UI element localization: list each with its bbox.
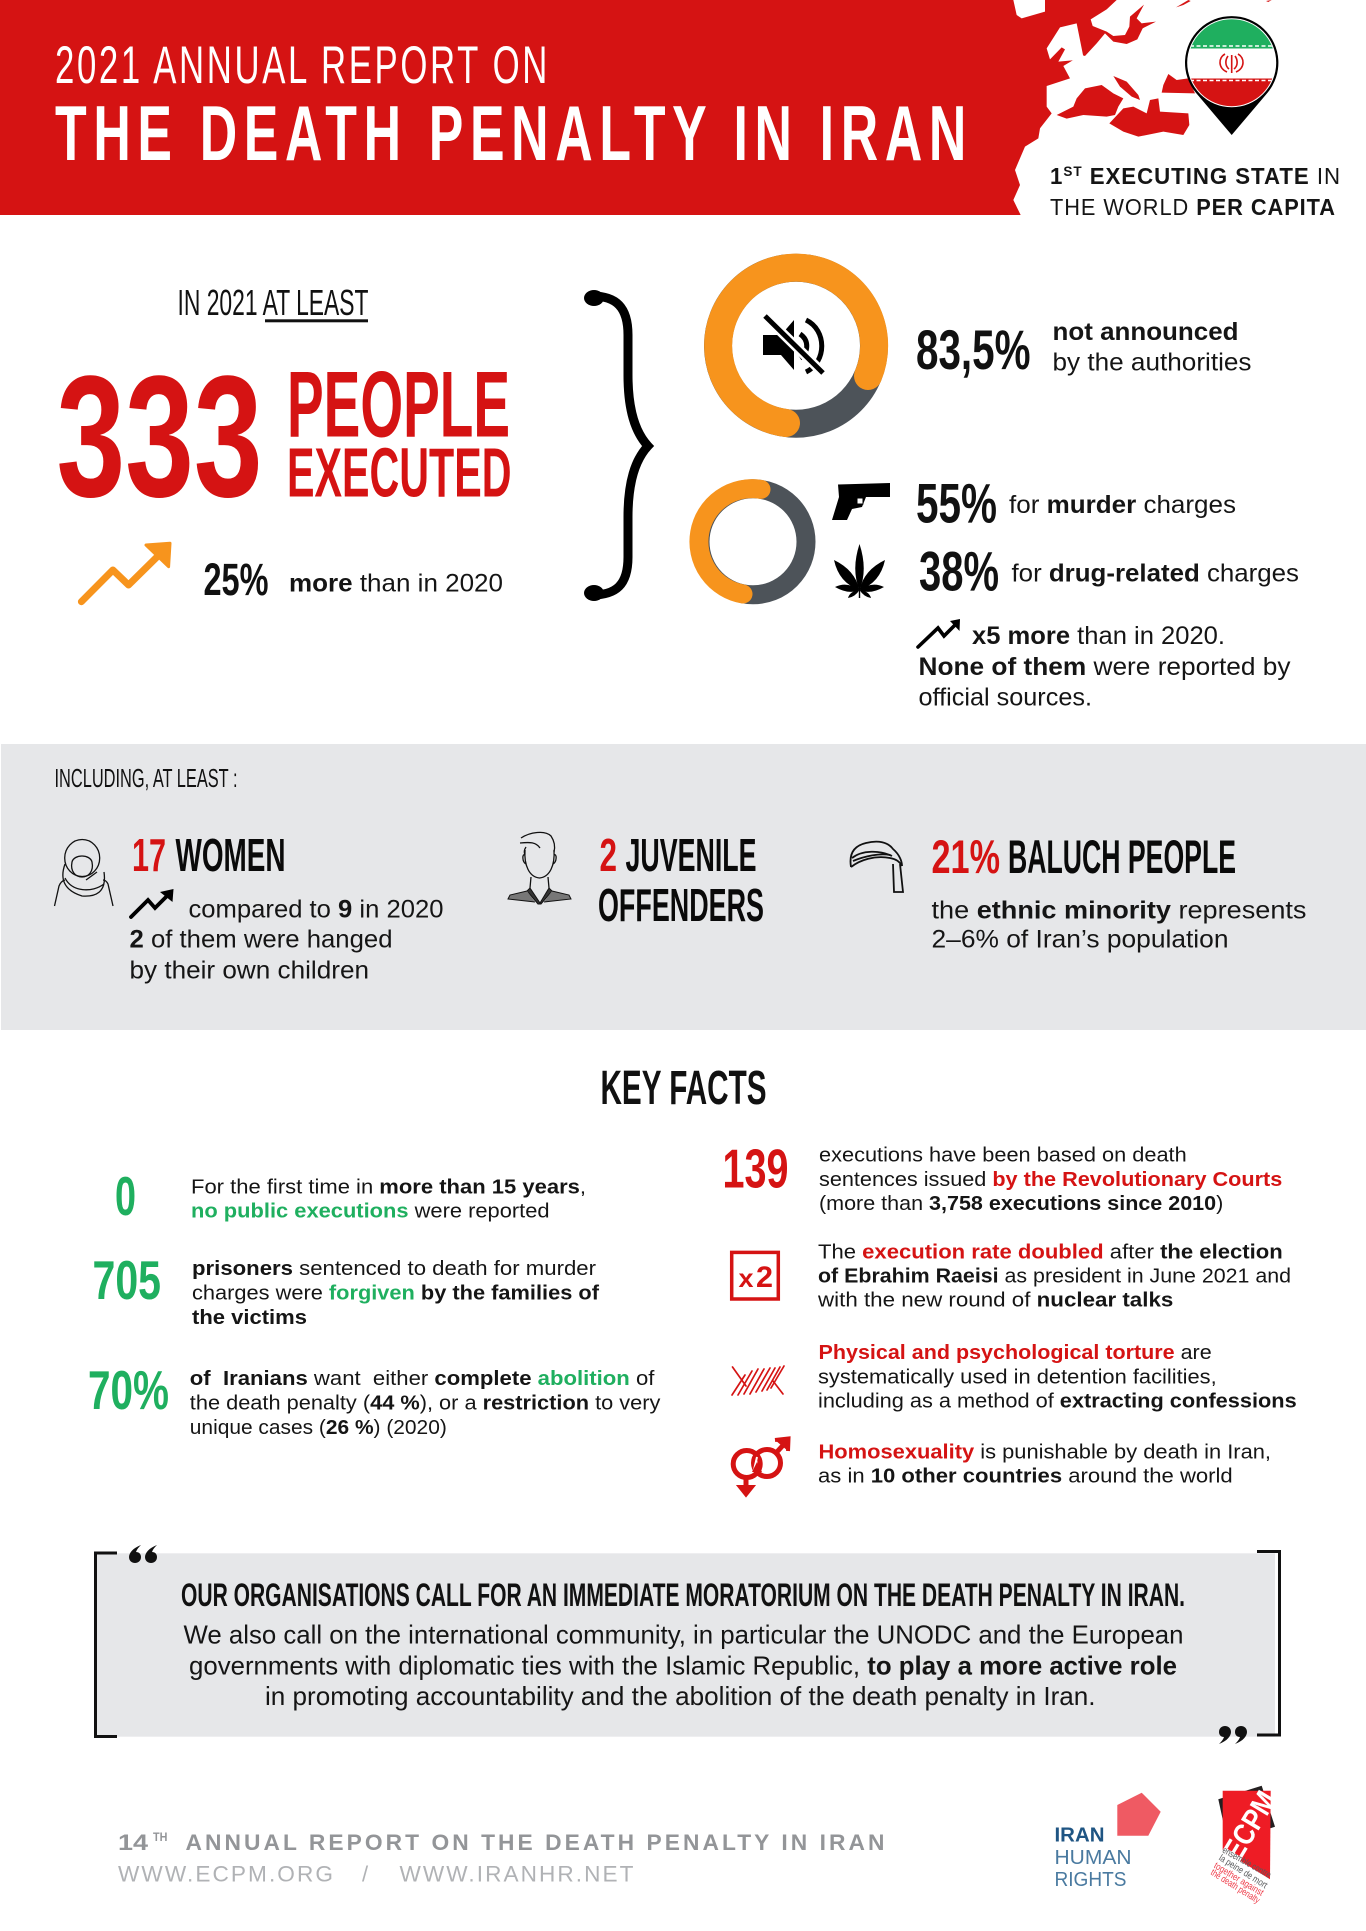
header banner xyxy=(0,0,1341,220)
333 people executed: PEOPLE xyxy=(287,352,510,457)
fact: execution rate doubled: The execution rate doubled after the election xyxy=(818,1240,1283,1263)
logo: ECPM: ECPM xyxy=(1217,1786,1283,1866)
drug note: None of them were reported by xyxy=(918,653,1291,681)
fact: torture: including as a method of extracting confessions xyxy=(818,1389,1297,1412)
websites: WWW.IRANHR.NET xyxy=(400,1862,636,1887)
panel: headline figure xyxy=(56,282,512,605)
intro line: IN 2021 AT LEAST xyxy=(178,282,368,323)
icon: x2 box: 2 xyxy=(756,1261,773,1294)
21 percent Baluch people: 21% xyxy=(932,830,1000,883)
logo: ECPM xyxy=(1208,1786,1283,1906)
panel: key facts right xyxy=(722,1137,1297,1496)
2 juvenile offenders: 2 xyxy=(600,829,617,881)
logo: Iran Human Rights: HUMAN xyxy=(1054,1847,1132,1869)
icon: x2 box xyxy=(732,1252,778,1299)
fact: 705 forgiven: 705 xyxy=(92,1249,161,1311)
fact: homosexuality: Homosexuality is punishable by death in Iran, xyxy=(818,1440,1271,1463)
fact: homosexuality xyxy=(818,1440,1271,1487)
report line: 14 xyxy=(118,1830,149,1855)
murder stat: 55% xyxy=(916,472,997,535)
websites: / xyxy=(362,1862,369,1887)
fact: torture: systematically used in detention facilities, xyxy=(818,1365,1217,1388)
333 people executed xyxy=(56,339,512,533)
icon: turban xyxy=(851,842,903,892)
2 juvenile offenders: OFFENDERS xyxy=(598,879,764,931)
icon: cannabis leaf xyxy=(834,544,885,598)
panel: call to action quote xyxy=(96,1545,1280,1744)
panel: including at least xyxy=(1,744,1366,1030)
icon: young man xyxy=(508,832,571,904)
panel: key facts left xyxy=(88,1165,661,1439)
fact: zero public executions: 0 xyxy=(115,1165,136,1227)
call text: governments with diplomatic ties with the Islamic Republic, to play a more active role xyxy=(189,1650,1177,1680)
report line: ANNUAL REPORT ON THE DEATH PENALTY IN IRAN xyxy=(186,1830,888,1855)
fact: 705 forgiven: charges were forgiven by the families of xyxy=(192,1281,599,1304)
call text: in promoting accountability and the abolition of the death penalty in Iran. xyxy=(265,1681,1096,1711)
fact: torture xyxy=(818,1341,1297,1412)
women details xyxy=(130,895,444,984)
icon: woman in headscarf xyxy=(54,840,113,906)
fact: execution rate doubled: with the new round of nuclear talks xyxy=(817,1289,1173,1312)
fact: torture: Physical and psychological torture are xyxy=(818,1341,1212,1364)
25 percent more: more than in 2020 xyxy=(289,570,503,598)
Baluch details: 2–6% of Iran’s population xyxy=(932,926,1228,954)
logo: Iran Human Rights: RIGHTS xyxy=(1054,1869,1126,1891)
icon: pistol xyxy=(832,483,890,520)
title: 2021 ANNUAL REPORT ON xyxy=(55,36,550,95)
drug note: x5 more than in 2020. xyxy=(972,622,1225,650)
icon: black rising arrow xyxy=(131,889,174,917)
not announced stat: 83,5% xyxy=(916,318,1030,381)
murder stat xyxy=(916,472,1236,535)
Baluch details xyxy=(932,896,1306,954)
drug stat: for drug-related charges xyxy=(1012,560,1299,588)
drug note xyxy=(918,622,1291,712)
fact: 70 percent want abolition xyxy=(88,1359,661,1439)
websites: WWW.ECPM.ORG xyxy=(118,1862,335,1887)
logo: Iran Human Rights xyxy=(1054,1793,1161,1891)
section label: INCLUDING, AT LEAST : xyxy=(54,763,238,793)
fact: execution rate doubled xyxy=(817,1240,1291,1312)
websites xyxy=(118,1862,636,1887)
drug note: official sources. xyxy=(918,684,1092,712)
21 percent Baluch people xyxy=(932,830,1236,883)
executing state caption xyxy=(1050,163,1341,220)
report line: TH xyxy=(153,1830,167,1844)
17 women: 17 xyxy=(132,829,166,881)
icon: orange rising arrow xyxy=(81,543,170,602)
2 juvenile offenders xyxy=(598,829,764,931)
fact: 70 percent want abolition: unique cases (26 %) (2020) xyxy=(190,1416,447,1439)
logo: ECPM: together against xyxy=(1212,1860,1266,1899)
logo: Iran Human Rights: IRAN xyxy=(1054,1825,1104,1847)
fact: 139 Revolutionary Courts xyxy=(722,1137,1282,1215)
heading: key facts: KEY FACTS xyxy=(600,1062,766,1115)
fact: 139 Revolutionary Courts: (more than 3,758 executions since 2010 ) xyxy=(819,1192,1223,1215)
icon: gender symbols xyxy=(733,1438,788,1496)
not announced stat: not announced xyxy=(1052,318,1238,346)
murder stat: for murder charges xyxy=(1009,491,1236,519)
map of Europe coastline xyxy=(950,0,1272,215)
intro line xyxy=(178,282,368,323)
closing quotation marks xyxy=(1219,1726,1247,1744)
Baluch details: the ethnic minority represents xyxy=(932,896,1306,924)
brace xyxy=(584,290,648,601)
opening quotation marks xyxy=(129,1545,157,1563)
fact: 70 percent want abolition: of Iranians want either complete abolition of xyxy=(190,1367,655,1390)
fact: execution rate doubled: of Ebrahim Raeisi as president in June 2021 and xyxy=(818,1265,1291,1288)
logo: ECPM: la peine de mort xyxy=(1217,1853,1269,1891)
executing state caption: ST xyxy=(1063,163,1083,179)
fact: 70 percent want abolition: the death penalty ( 44 %), or a restriction to very xyxy=(190,1391,661,1414)
fact: zero public executions: no public executions were reported xyxy=(191,1200,550,1223)
women details: compared to 9 in 2020 xyxy=(188,895,444,923)
fact: 705 forgiven: prisoners sentenced to death for murder xyxy=(192,1257,596,1280)
333 people executed: EXECUTED xyxy=(287,434,512,512)
25 percent more: 25% xyxy=(204,554,268,605)
icon: x2 box: x xyxy=(738,1265,754,1293)
call text: We also call on the international community, in particular the UNODC and the European xyxy=(184,1619,1184,1649)
25 percent more xyxy=(204,554,503,605)
call text xyxy=(184,1619,1184,1711)
right bracket xyxy=(1257,1552,1280,1735)
not announced stat xyxy=(916,318,1252,381)
icon: black rising arrow xyxy=(918,619,960,647)
fact: 139 Revolutionary Courts: executions have been based on death xyxy=(819,1144,1187,1167)
drug stat: 38% xyxy=(919,540,999,603)
donut chart charges xyxy=(699,489,806,595)
fact: 70 percent want abolition: 70% xyxy=(88,1359,169,1421)
fact: zero public executions: For the first time in more than 15 years , xyxy=(191,1175,586,1198)
panel: execution statistics xyxy=(699,268,1299,712)
drug stat xyxy=(919,540,1299,603)
fact: 705 forgiven xyxy=(92,1249,599,1329)
map pin with Iranian flag xyxy=(1185,15,1279,135)
fact: zero public executions xyxy=(115,1165,586,1227)
333 people executed: 333 xyxy=(56,339,262,533)
women details: by their own children xyxy=(130,956,369,984)
women details: 2 of them were hanged xyxy=(130,926,392,954)
icon: barbed wire xyxy=(732,1366,784,1395)
executing state caption: IN xyxy=(1317,163,1342,189)
title xyxy=(55,36,973,177)
donut chart 83.5 percent xyxy=(718,268,874,424)
icon: muted speaker xyxy=(763,316,823,373)
logo: ECPM: ensemble contre xyxy=(1220,1845,1273,1881)
executing state caption: EXECUTING STATE xyxy=(1083,163,1310,189)
2 juvenile offenders: JUVENILE xyxy=(626,829,756,881)
17 women: WOMEN xyxy=(176,829,286,881)
footer xyxy=(118,1786,1283,1906)
logo: ECPM: the death penalty xyxy=(1208,1867,1262,1906)
fact: 705 forgiven: the victims xyxy=(192,1306,307,1329)
not announced stat: by the authorities xyxy=(1052,349,1252,377)
17 women xyxy=(132,829,286,881)
fact: 139 Revolutionary Courts: sentences issued by the Revolutionary Courts xyxy=(819,1168,1282,1191)
left bracket xyxy=(96,1553,117,1736)
executing state caption: THE WORLD PER CAPITA xyxy=(1050,194,1336,220)
fact: homosexuality: as in 10 other countries around the world xyxy=(818,1464,1233,1487)
fact: 139 Revolutionary Courts: 139 xyxy=(722,1137,788,1199)
executing state caption: 1 xyxy=(1050,163,1063,189)
